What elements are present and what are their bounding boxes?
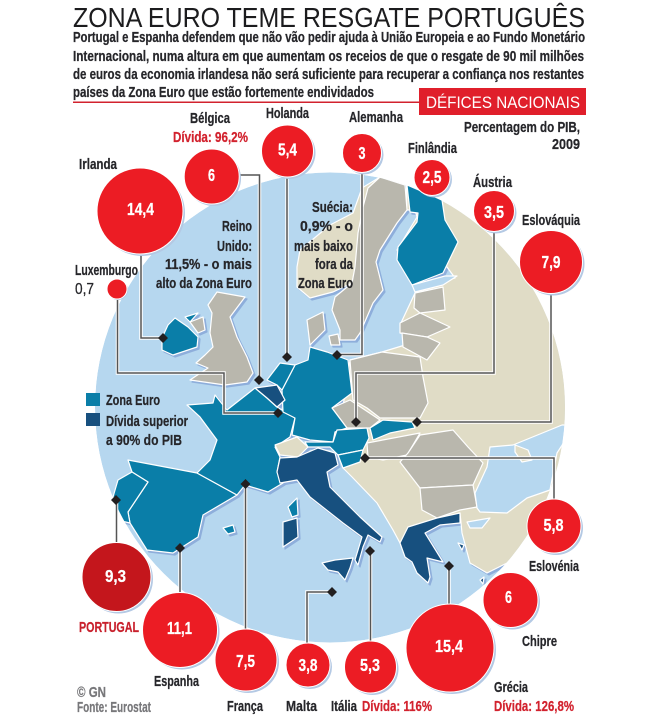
- Black Sea: [475, 425, 575, 513]
- Romania: [400, 430, 483, 488]
- bubble: Bélgica: [173, 110, 248, 206]
- Slovakia: [370, 420, 415, 440]
- Marmara: [467, 518, 490, 528]
- Crimea: [515, 445, 532, 462]
- Poland: [350, 352, 428, 418]
- callout: Suécia: Suécia:: [312, 199, 353, 216]
- bubble: Grécia: [406, 604, 574, 715]
- unit note: Percentagem do PIB,: [464, 119, 580, 136]
- bubble: Luxemburgo: 0,7: [75, 281, 94, 298]
- Denmark: [307, 312, 325, 345]
- bubble: Eslováquia: 7,9: [542, 252, 561, 272]
- Estonia: [414, 287, 445, 313]
- bubble: Malta: Malta: [286, 698, 318, 715]
- bubble: Eslováquia: [520, 212, 584, 296]
- location markers: [111, 333, 454, 597]
- bubble: Bélgica: 6: [208, 165, 215, 185]
- bubble: Bélgica: Dívida: 96,2%: [173, 129, 248, 146]
- bubble: Portugal: PORTUGAL: [79, 619, 139, 636]
- leader lines: [116, 172, 554, 644]
- bubble: Espanha: [142, 592, 220, 690]
- bubble: Malta: [286, 643, 332, 715]
- Ireland: [162, 318, 198, 355]
- legend: [86, 392, 188, 449]
- bubble: Irlanda: Irlanda: [79, 156, 118, 173]
- Great Britain: [190, 292, 253, 385]
- Latvia: [400, 313, 450, 337]
- bubble: Irlanda: [79, 156, 185, 256]
- bubble: Portugal: 9,3: [105, 566, 126, 586]
- bubble: Alemanha: [342, 109, 403, 174]
- bubble: Eslovénia: Eslovénia: [529, 558, 579, 575]
- Greece: [400, 513, 460, 583]
- bubble: Itália: [331, 641, 432, 715]
- Gulf of Finland: [412, 276, 457, 292]
- Balearic Islands: [223, 525, 235, 534]
- callout: Suécia: Zona Euro: [298, 275, 353, 292]
- source credit: [77, 684, 151, 716]
- bubble: Bélgica: Bélgica: [190, 110, 230, 127]
- bubble: Chipre: Chipre: [522, 633, 557, 650]
- bubble: Espanha: Espanha: [154, 673, 199, 690]
- Northern Ireland: [190, 317, 205, 333]
- bubble: Grécia: Grécia: [494, 679, 528, 696]
- Finland: [397, 185, 458, 285]
- Italy: [277, 448, 382, 565]
- bubble: Finlândia: Finlândia: [408, 140, 457, 157]
- Czech Republic: [332, 400, 380, 428]
- land: Sweden: [332, 177, 407, 340]
- bubble: Áustria: [473, 174, 516, 234]
- Lithuania: [402, 333, 440, 360]
- bubble: Itália: 5,3: [360, 655, 380, 675]
- callout: Reino Unido: [156, 218, 252, 292]
- callout: Reino Unido: 11,5% - o mais: [165, 256, 252, 273]
- bubble: Malta: 3,8: [298, 655, 318, 675]
- bubble: Itália: Itália: [331, 698, 357, 715]
- bubble: Irlanda: 14,4: [127, 199, 154, 219]
- bubble: Espanha: 11,1: [167, 618, 192, 638]
- Slovenia: [338, 450, 363, 468]
- bubble: Alemanha: Alemanha: [349, 109, 403, 126]
- intro text: [73, 30, 585, 101]
- section banner: défices nacionais: DÉFICES NACIONAIS: [426, 93, 580, 112]
- unit note: [464, 119, 580, 153]
- France: [187, 388, 295, 495]
- map of Europe: [95, 172, 565, 642]
- Donegal: [185, 313, 198, 322]
- section banner: défices nacionais: [73, 88, 586, 115]
- bubble: Holanda: 5,4: [278, 140, 297, 160]
- bubble: Áustria: 3,5: [484, 202, 504, 222]
- legend: Dívida superior: [106, 413, 188, 430]
- unit note: 2009: [552, 136, 580, 153]
- callout: Reino Unido: alto da Zona Euro: [156, 275, 252, 292]
- bubble: Grécia: Dívida: 126,8%: [494, 698, 574, 715]
- bubble: Eslovénia: [527, 499, 583, 575]
- Portugal: [113, 472, 148, 523]
- bubble: França: França: [227, 698, 263, 715]
- bubble: Eslovénia: 5,8: [544, 515, 564, 535]
- bubble: Finlândia: 2,5: [422, 167, 442, 187]
- bubble: Luxemburgo: Luxemburgo: [75, 262, 138, 279]
- bubble: Alemanha: 3: [358, 143, 366, 163]
- bubble: Chipre: [483, 572, 557, 650]
- intro text: países da Zona Euro que estão fortemente endividados: [73, 85, 374, 101]
- land: eastern Europe and Turkey: [342, 186, 565, 576]
- bubble: França: 7,5: [236, 651, 255, 671]
- bubble: Finlândia: [408, 140, 457, 198]
- legend: Zona Euro: [106, 392, 160, 409]
- bubble: Áustria: Áustria: [473, 174, 512, 191]
- Spain: [128, 460, 237, 553]
- Hungary: [367, 433, 420, 460]
- callout: Suécia: 0,9% - o: [300, 218, 353, 235]
- callout: Suécia: fora da: [315, 256, 353, 273]
- bubble: Itália: Dívida: 116%: [362, 698, 432, 715]
- Austria: [305, 428, 369, 455]
- source credit: Fonte: Eurostat: [77, 699, 151, 716]
- bubble: França: [215, 629, 279, 715]
- Aegean islands: [458, 543, 484, 584]
- callout: Reino Unido: Reino: [222, 218, 252, 235]
- Bulgaria: [420, 485, 477, 518]
- Sardinia: [283, 518, 298, 547]
- callout: Reino Unido: Unido:: [217, 238, 252, 255]
- bubble: Holanda: Holanda: [266, 105, 309, 122]
- Corsica: [288, 498, 298, 517]
- Netherlands: [267, 363, 295, 390]
- bubble: Luxemburgo: [75, 262, 138, 300]
- Sicily: [322, 558, 353, 580]
- bubble: Grécia: 15,4: [435, 636, 463, 656]
- source credit: © GN: [77, 684, 106, 701]
- Belgium: [255, 385, 285, 407]
- bubble: Eslováquia: Eslováquia: [522, 212, 580, 229]
- bubble: Portugal: [79, 542, 153, 636]
- Switzerland: [275, 437, 308, 457]
- Germany: [282, 347, 352, 442]
- callout: Suécia: mais baixo: [294, 238, 353, 255]
- callout: Suécia: [294, 199, 353, 292]
- bubble: Chipre: 6: [505, 587, 512, 607]
- title: ZONA EURO TEME RESGATE PORTUGUÊS: [73, 2, 585, 33]
- Danish islands: [329, 334, 340, 345]
- legend: a 90% do PIB: [106, 432, 182, 449]
- bubble: Holanda: [262, 105, 316, 179]
- land: Norway: [297, 177, 380, 298]
